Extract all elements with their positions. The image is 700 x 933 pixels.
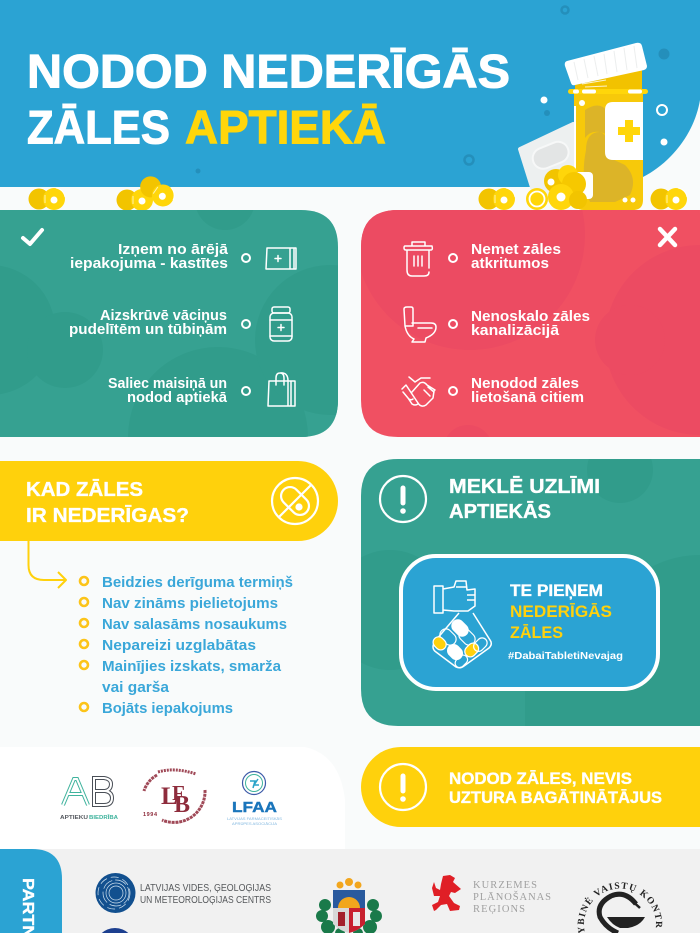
logo: Kurzeme region: REĢIONS <box>473 904 525 915</box>
list: reasons: Mainījies izskats, smarža <box>102 659 282 675</box>
icon: cross coin <box>526 188 548 210</box>
heading text: APTIEKĀS <box>449 501 551 523</box>
step text: close bottles <box>69 308 227 338</box>
icon: trash bin <box>404 242 432 276</box>
sticker text <box>508 581 623 662</box>
icon: box <box>266 248 296 269</box>
partners tab <box>0 849 62 933</box>
logo: LFB: B <box>174 792 190 818</box>
step text: bag <box>108 376 228 406</box>
sticker text: TE PIEŅEM <box>510 581 603 600</box>
icon: crossed pill <box>272 478 318 524</box>
capsules pair <box>116 172 178 211</box>
list: reasons: Nepareizi uzglabātas <box>102 638 256 654</box>
text: trash: Nemet zāles <box>471 242 561 258</box>
sticker text: #DabaiTabletiNevajag <box>508 651 623 662</box>
banner text: UZTURA BAGĀTINĀTĀJUS <box>449 788 662 807</box>
list: reasons: Beidzies derīguma termiņš <box>102 575 293 591</box>
icon: jar <box>270 307 292 341</box>
bullet <box>242 320 250 328</box>
text: trash <box>471 242 561 272</box>
heading text <box>449 476 600 523</box>
icon: hand with bag of pills <box>431 581 491 669</box>
logo: LFAA <box>227 772 282 826</box>
step text: bag: nodod aptiekā <box>127 390 228 406</box>
heading text: KAD ZĀLES <box>26 478 143 501</box>
bullet <box>449 254 457 262</box>
heading: when medicine is unusable <box>0 461 338 541</box>
text: share <box>471 376 584 406</box>
logo: LFAA: LFAA <box>232 799 277 816</box>
heading text: MEKLĒ UZLĪMI <box>449 476 600 498</box>
logo: coat of arms <box>316 878 382 933</box>
icon: exclamation <box>380 476 426 522</box>
bullet <box>449 387 457 395</box>
title <box>27 44 510 154</box>
step text: remove packaging <box>70 242 229 272</box>
text: trash: atkritumos <box>471 256 549 272</box>
banner: return medicine <box>361 747 700 827</box>
logo: LFB: F <box>172 781 185 805</box>
step text: close bottles: pudelītēm un tūbiņām <box>69 322 227 338</box>
banner text: NODOD ZĀLES, NEVIS <box>449 769 632 788</box>
bullet <box>242 254 250 262</box>
bullet <box>242 387 250 395</box>
step text: remove packaging: iepakojuma - kastītes <box>70 256 228 272</box>
icon: shopping bag <box>268 373 295 406</box>
banner text <box>449 769 662 807</box>
text: sewer: Nenoskalo zāles <box>471 309 590 325</box>
heading text: IR NEDERĪGAS? <box>26 504 189 527</box>
list: reasons: Nav zināms pielietojums <box>102 596 278 612</box>
panel: association logos <box>0 747 345 849</box>
capsules on left <box>28 188 65 210</box>
logo: LFB: 1994 <box>143 812 158 818</box>
list: reasons: vai garša <box>102 680 170 696</box>
logo: AB <box>60 778 118 821</box>
text: sewer: kanalizācijā <box>471 323 560 339</box>
logo: Kurzeme region: KURZEMES <box>473 880 537 891</box>
logo: environment centre <box>96 873 271 913</box>
logo: Kurzeme region <box>432 875 551 915</box>
step text: remove packaging: Izņem no ārējā <box>118 242 229 258</box>
icon: pill bottle with blister pack <box>520 43 668 210</box>
logo: AB: APTIEKU <box>60 815 88 821</box>
logo: LFAA: APRŪPES ASOCIĀCIJA <box>232 822 277 826</box>
panel: don't <box>361 210 700 437</box>
text: share: lietošanā citiem <box>471 390 584 406</box>
arrow to list <box>28 541 66 588</box>
title: APTIEKĀ <box>185 100 386 154</box>
header banner <box>0 0 700 187</box>
title: NODOD NEDERĪGĀS <box>27 44 510 98</box>
list: reasons: Nav salasāms nosaukums <box>102 617 287 633</box>
text: share: Nenodod zāles <box>471 376 579 392</box>
capsules far right <box>650 188 687 210</box>
capsules right <box>478 188 515 210</box>
list: reasons: Bojāts iepakojums <box>102 701 233 717</box>
icon: check mark <box>23 230 42 244</box>
icon: exclamation <box>380 764 426 810</box>
logo: LFB: L <box>161 783 178 810</box>
logo: AB: BIEDRĪBA <box>89 814 118 821</box>
sticker text: ZĀLES <box>510 623 563 642</box>
panel: do <box>0 210 338 437</box>
step text: close bottles: Aizskrūvē vāciņus <box>100 308 227 324</box>
icon: handshake <box>402 377 435 406</box>
sticker text: NEDERĪGĀS <box>510 602 612 621</box>
logo: environment centre: UN METEOROLOĢIJAS CENTRS <box>140 894 271 906</box>
bullet <box>449 320 457 328</box>
heading text <box>26 478 189 527</box>
icon: cross mark <box>660 229 675 245</box>
list: reasons <box>80 575 293 717</box>
logo: medicine control seal: YBINĖ VAISTŲ KONTROLĖS TAR <box>578 882 662 933</box>
sticker <box>401 556 658 689</box>
step text: bag: Saliec maisiņā un <box>108 376 227 392</box>
icon: toilet <box>404 307 436 342</box>
panel: look for sticker <box>361 459 700 726</box>
logo: environment centre: LATVIJAS VIDES, ĢEOLOĢIJAS <box>140 882 271 894</box>
logo: Kurzeme region: PLĀNOŠANAS <box>473 891 551 903</box>
logo: LFAA: LATVIJAS FARMACEITISKĀS <box>227 817 282 821</box>
text: sewer <box>471 309 590 339</box>
logo: second partner <box>95 928 202 933</box>
title: ZĀLES <box>27 100 170 154</box>
logo: LFB <box>143 770 205 822</box>
